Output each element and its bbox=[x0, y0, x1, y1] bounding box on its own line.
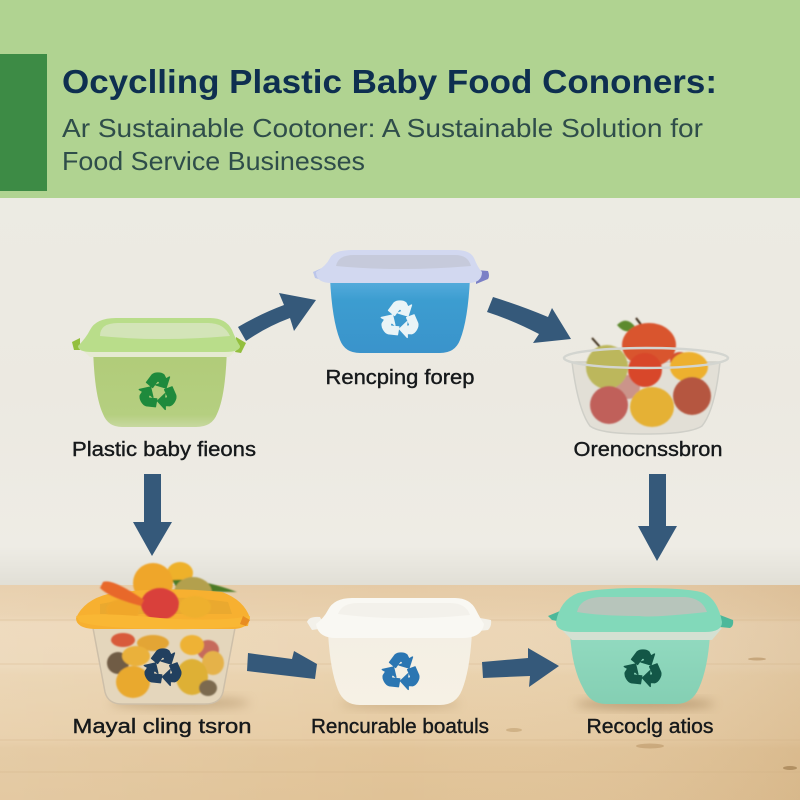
shadow under orange container bbox=[110, 697, 250, 709]
header accent block bbox=[0, 54, 47, 191]
container: clear with fruit bbox=[564, 318, 728, 434]
label: plastic baby: Plastic baby fieons bbox=[72, 438, 256, 461]
container: white bbox=[307, 598, 491, 705]
subtitle: Ar Sustainable Cootoner: A Sustainable Solution for bbox=[62, 113, 703, 143]
recycle icon bbox=[141, 649, 185, 687]
wooden table bbox=[0, 585, 800, 800]
shadow under white container bbox=[340, 699, 460, 709]
fruit on top bbox=[133, 562, 237, 609]
label: mayal: Mayal cling tsron bbox=[72, 715, 252, 738]
container: blue bbox=[313, 250, 489, 353]
arrow: left down bbox=[133, 474, 172, 556]
recycle icon bbox=[378, 301, 422, 339]
label: orenocnssbron: Orenocnssbron bbox=[574, 438, 722, 461]
label: rencping: Rencping forep bbox=[326, 366, 474, 389]
container: teal bbox=[548, 588, 733, 704]
arrow: orange to white bbox=[247, 651, 317, 679]
subtitle: Food Service Businesses bbox=[62, 146, 365, 176]
fruit in tub bbox=[107, 633, 224, 698]
header banner bbox=[0, 0, 800, 198]
fruit bbox=[586, 318, 711, 427]
title: Ocyclling Plastic Baby Food Cononers: bbox=[62, 63, 717, 100]
arrow: green to blue bbox=[238, 293, 316, 341]
container: green bbox=[72, 318, 246, 427]
recycle icon bbox=[136, 373, 180, 411]
label: recoclg: Recoclg atios bbox=[586, 715, 714, 738]
arrow: white to teal bbox=[482, 648, 559, 687]
background wall bbox=[0, 198, 800, 585]
arrow: right down bbox=[638, 474, 677, 561]
shadow under teal container bbox=[575, 699, 715, 709]
label: rencurable: Rencurable boatuls bbox=[311, 715, 489, 738]
arrow: blue to fruit bbox=[487, 297, 571, 343]
recycle icon bbox=[621, 650, 665, 688]
container: orange lid with fruit bbox=[76, 562, 250, 704]
recycle icon bbox=[379, 653, 423, 691]
